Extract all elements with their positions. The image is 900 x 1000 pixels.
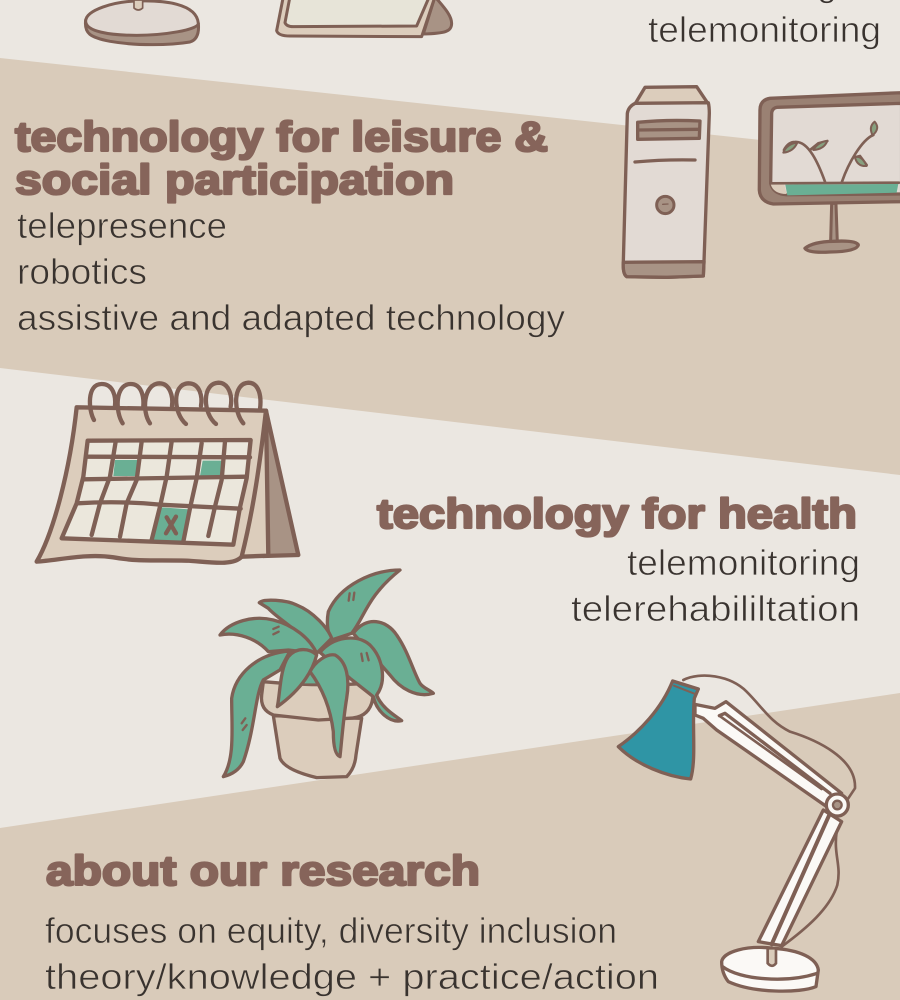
icon: cropped lamp base (85, 0, 199, 45)
text block: research description: focuses on equity, diversity inclusion (45, 910, 617, 951)
text block: health list: telerehabililtation (571, 588, 860, 629)
icon: monitor with plant (759, 93, 900, 252)
icon: cropped tablet (277, 0, 452, 37)
text block: leisure list: robotics (17, 251, 147, 292)
text block: leisure list: assistive and adapted technology (17, 297, 565, 338)
icon: potted plant (220, 570, 433, 778)
icon: desk calendar (37, 383, 298, 563)
heading: about our research: about our research (46, 847, 480, 894)
heading: technology for leisure and social participation: technology for leisure & (15, 113, 548, 160)
heading: technology for leisure and social participation: social participation (15, 156, 454, 203)
text block: health list (571, 542, 860, 629)
icon: computer tower (623, 87, 709, 277)
heading: technology for leisure and social participation (15, 113, 548, 203)
text: top telemonitoring: telemonitoring (648, 9, 881, 50)
text block: leisure list (17, 205, 565, 338)
text block: research description (45, 910, 659, 997)
text block: research description: theory/knowledge + practice/action (45, 956, 659, 997)
panel: leisure band (0, 58, 900, 475)
panel: research band (0, 693, 900, 1000)
text block: health list: telemonitoring (627, 542, 860, 583)
icon: desk lamp (618, 676, 855, 991)
heading: technology for health: technology for health (377, 490, 857, 537)
text block: leisure list: telepresence (17, 205, 227, 246)
